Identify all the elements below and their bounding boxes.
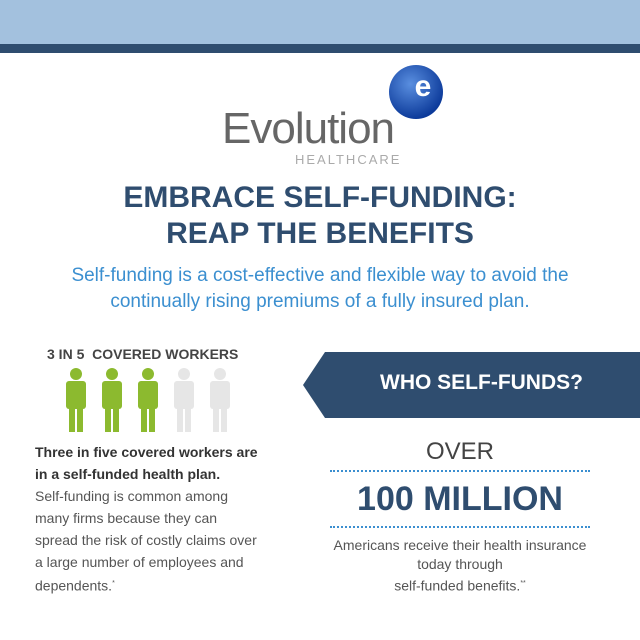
text block left: many firms because they can: [35, 510, 217, 526]
subtitle: Self-funding is a cost-effective and flexible way to avoid the: [71, 265, 569, 286]
text block left: spread the risk of costly claims over: [35, 532, 257, 548]
text block left: [35, 444, 258, 594]
subtitle: continually rising premiums of a fully insured plan.: [110, 291, 530, 312]
logo: Evolution: [222, 104, 394, 153]
icon: people: [66, 368, 230, 432]
text block left: Self-funding is common among: [35, 488, 228, 504]
banner: who self-funds: WHO SELF-FUNDS?: [380, 371, 583, 394]
stat: over 100 million: 100 MILLION: [357, 480, 563, 518]
stat: over 100 million: OVER: [426, 438, 494, 465]
subtitle: [71, 265, 569, 312]
logo: [222, 65, 443, 167]
heading: 3 in 5: 3 IN 5 COVERED WORKERS: [47, 346, 238, 362]
stat: over 100 million: today through: [417, 556, 503, 572]
banner: who self-funds: [303, 352, 640, 418]
text block left: a large number of employees and: [35, 554, 244, 570]
title: REAP THE BENEFITS: [166, 217, 474, 250]
stat: over 100 million: Americans receive their health insurance: [334, 537, 586, 553]
stat: over 100 million: self-funded benefits.**: [394, 578, 526, 594]
icon: logo sphere: [389, 65, 443, 119]
top band: [0, 0, 640, 53]
title: EMBRACE SELF-FUNDING:: [123, 181, 517, 214]
icon: logo sphere: e: [415, 70, 431, 103]
text block left: Three in five covered workers are: [35, 444, 258, 460]
text block left: in a self-funded health plan.: [35, 466, 220, 482]
logo: HEALTHCARE: [295, 152, 401, 167]
stat: over 100 million: [330, 438, 590, 594]
title: [123, 181, 517, 250]
text block left: dependents.*: [35, 578, 115, 594]
